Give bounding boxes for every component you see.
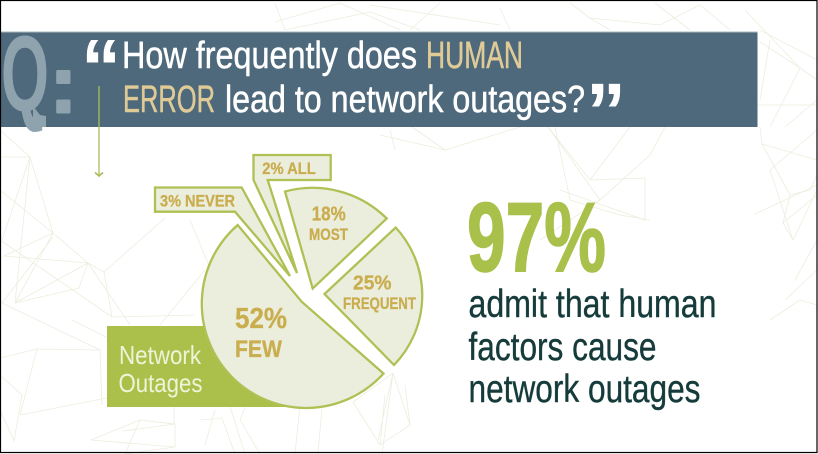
question text line 2: lead to network outages? xyxy=(225,79,585,121)
pie labels: 52% xyxy=(235,303,287,335)
legend box: network outages xyxy=(107,326,287,407)
slice: 25% frequent xyxy=(324,228,422,365)
legend box: network outages: Network xyxy=(119,340,202,370)
pie labels: 3% NEVER xyxy=(160,192,235,211)
callout: 2% all xyxy=(254,155,331,273)
headline statistic: 97%: 97% xyxy=(467,182,606,292)
slice: 52% few xyxy=(202,225,384,408)
pie labels xyxy=(160,159,416,363)
pie labels: FEW xyxy=(235,336,282,363)
statistic description: factors cause xyxy=(468,326,656,369)
slice: 18% most xyxy=(285,188,387,288)
opening quote mark: “ xyxy=(81,23,121,112)
question text line 1: How frequently does xyxy=(122,35,417,77)
pie chart xyxy=(155,155,422,408)
pie labels: 25% xyxy=(353,272,392,294)
callout: 3% never xyxy=(155,188,290,276)
closing quote mark: ” xyxy=(586,67,626,156)
statistic description xyxy=(468,283,716,411)
pie labels: MOST xyxy=(309,225,348,244)
statistic description: admit that human xyxy=(468,283,716,326)
question text line 2 xyxy=(123,79,585,121)
arrow from question to chart xyxy=(95,86,103,176)
big Q: mark: Q xyxy=(1,13,49,134)
big Q: mark: : xyxy=(50,40,77,129)
question text line 2: ERROR xyxy=(123,79,215,121)
pie labels: FREQUENT xyxy=(343,294,416,313)
pie labels: 2% ALL xyxy=(262,159,316,178)
question banner xyxy=(0,13,758,156)
pie labels: 18% xyxy=(312,204,346,226)
statistic description: network outages xyxy=(468,368,700,411)
question text line 1: HUMAN xyxy=(426,35,523,77)
legend box: network outages: Outages xyxy=(118,368,202,398)
